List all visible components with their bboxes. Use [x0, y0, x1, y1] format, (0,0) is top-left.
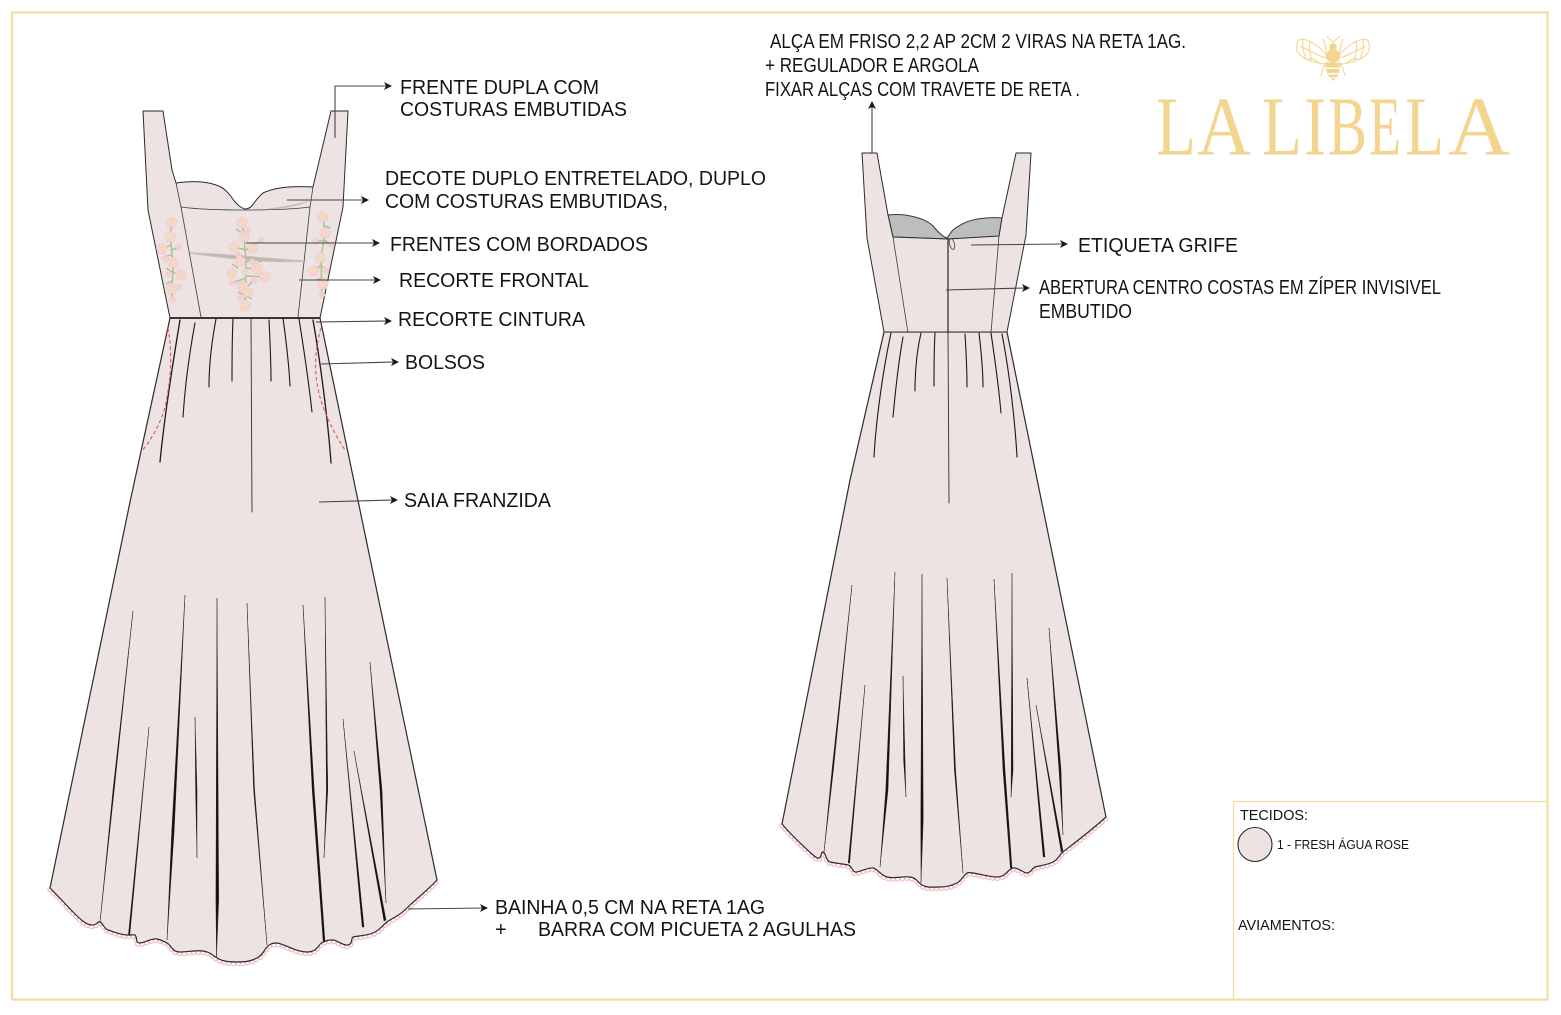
hem picot stitching — [50, 882, 437, 964]
callout: decote duplo: DECOTE DUPLO ENTRETELADO, DUPLO — [385, 168, 766, 190]
logo: wordmark: I — [1304, 80, 1326, 174]
logo: wordmark: A — [1197, 80, 1251, 174]
callout: abertura centro costas: EMBUTIDO — [1039, 301, 1132, 323]
callout: recorte cintura — [316, 309, 586, 331]
callout: bainha: + — [495, 919, 507, 941]
callout: alça: FIXAR ALÇAS COM TRAVETE DE RETA . — [765, 79, 1080, 101]
skirt folds — [824, 572, 1063, 883]
callout: recorte frontal — [299, 270, 589, 292]
gathers at waist — [874, 333, 1017, 503]
callout: etiqueta grife — [971, 235, 1238, 257]
logo: wordmark: E — [1369, 80, 1401, 174]
logo: wordmark: A — [1448, 80, 1510, 174]
callout: frentes com bordados — [246, 234, 648, 256]
logo: wordmark: L — [1405, 80, 1444, 174]
callout: bainha — [408, 897, 856, 941]
skirt — [50, 318, 437, 962]
front dress — [50, 111, 437, 964]
bodice and straps — [143, 111, 348, 318]
callout: bainha: BARRA COM PICUETA 2 AGULHAS — [538, 919, 856, 941]
callout: frentes com bordados: FRENTES COM BORDADOS — [390, 234, 648, 256]
invisible zipper — [948, 238, 956, 333]
gathers at waist — [160, 318, 331, 512]
callout: saia franzida: SAIA FRANZIDA — [404, 490, 552, 512]
heading: tecidos: TECIDOS: — [1240, 807, 1308, 824]
back dress — [782, 153, 1106, 889]
logo: wordmark — [1156, 80, 1510, 174]
heading: aviamentos: AVIAMENTOS: — [1238, 917, 1335, 934]
skirt folds — [100, 595, 386, 957]
callout: bainha: BAINHA 0,5 CM NA RETA 1AG — [495, 897, 765, 919]
panel: materials — [1234, 802, 1547, 1000]
fabric swatch — [1238, 828, 1272, 862]
logo: wordmark: L — [1156, 80, 1196, 174]
embroidery: centre — [226, 217, 270, 311]
callout: etiqueta grife: ETIQUETA GRIFE — [1078, 235, 1238, 257]
embroidery: left — [156, 217, 186, 303]
inner neckline lining — [888, 215, 1002, 239]
callout: frente dupla: FRENTE DUPLA COM — [400, 77, 599, 99]
callout: abertura centro costas: ABERTURA CENTRO COSTAS EM ZÍPER INVISIVEL — [1039, 276, 1441, 299]
callout: recorte frontal: RECORTE FRONTAL — [399, 270, 589, 292]
callout: alça — [765, 31, 1186, 153]
logo: wordmark: L — [1262, 80, 1302, 174]
callout: decote duplo — [287, 168, 766, 213]
embroidery: right — [308, 211, 334, 298]
callout: recorte cintura: RECORTE CINTURA — [398, 309, 586, 331]
bodice seams — [884, 236, 1007, 333]
bodice seams — [176, 183, 313, 317]
skirt — [782, 332, 1106, 887]
fabric name: 1 - FRESH ÁGUA ROSE — [1277, 837, 1409, 852]
callout: abertura centro costas — [946, 276, 1441, 323]
callout: decote duplo: COM COSTURAS EMBUTIDAS, — [385, 191, 668, 213]
pocket stitching — [141, 328, 345, 452]
logo: bee — [1296, 36, 1370, 81]
callout: saia franzida — [319, 490, 552, 512]
callout: bolsos: BOLSOS — [405, 352, 485, 374]
bodice and straps — [862, 153, 1031, 332]
waist seam — [170, 317, 320, 319]
callout: frente dupla — [335, 77, 627, 138]
callout: bolsos — [321, 352, 485, 374]
hem picot stitching — [782, 819, 1106, 889]
logo: wordmark: B — [1328, 80, 1367, 174]
callout: alça: + REGULADOR E ARGOLA — [765, 55, 980, 77]
callout: alça: ALÇA EM FRISO 2,2 AP 2CM 2 VIRAS NA RETA 1AG. — [770, 31, 1186, 53]
callout: frente dupla: COSTURAS EMBUTIDAS — [400, 99, 627, 121]
